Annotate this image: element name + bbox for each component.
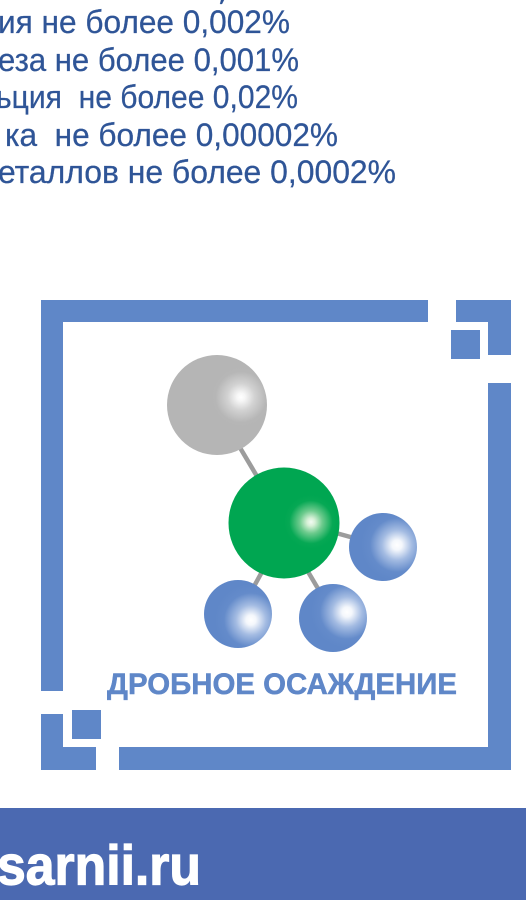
top right corner bracket bbox=[456, 300, 511, 355]
logo frame bbox=[41, 300, 511, 770]
iron limit line: еза не более 0,001% bbox=[0, 42, 299, 78]
logo caption: ДРОБНОЕ ОСАЖДЕНИЕ bbox=[107, 668, 457, 701]
bottom left square bbox=[72, 710, 101, 739]
green atom bbox=[228, 468, 340, 578]
calcium limit line: ьция не более 0,02% bbox=[0, 79, 298, 115]
specification text block bbox=[0, 0, 396, 190]
bottom left corner bracket bbox=[41, 714, 96, 770]
bonds bbox=[239, 446, 354, 592]
comma fragment of cropped line bbox=[220, 0, 224, 4]
molecule icon bbox=[167, 355, 417, 652]
top right square bbox=[451, 330, 480, 359]
gray atom bbox=[167, 355, 267, 455]
blue atom bottom left bbox=[204, 580, 272, 648]
metals limit line: еталлов не более 0,0002% bbox=[0, 154, 396, 190]
fourth limit line: ка не более 0,00002% bbox=[5, 117, 338, 153]
website address: sarnii.ru bbox=[0, 834, 201, 896]
blue atom bottom right bbox=[299, 584, 367, 652]
footer band bbox=[0, 808, 526, 900]
blue atom right bbox=[349, 513, 417, 581]
magnesium limit line: ия не более 0,002% bbox=[0, 4, 290, 40]
